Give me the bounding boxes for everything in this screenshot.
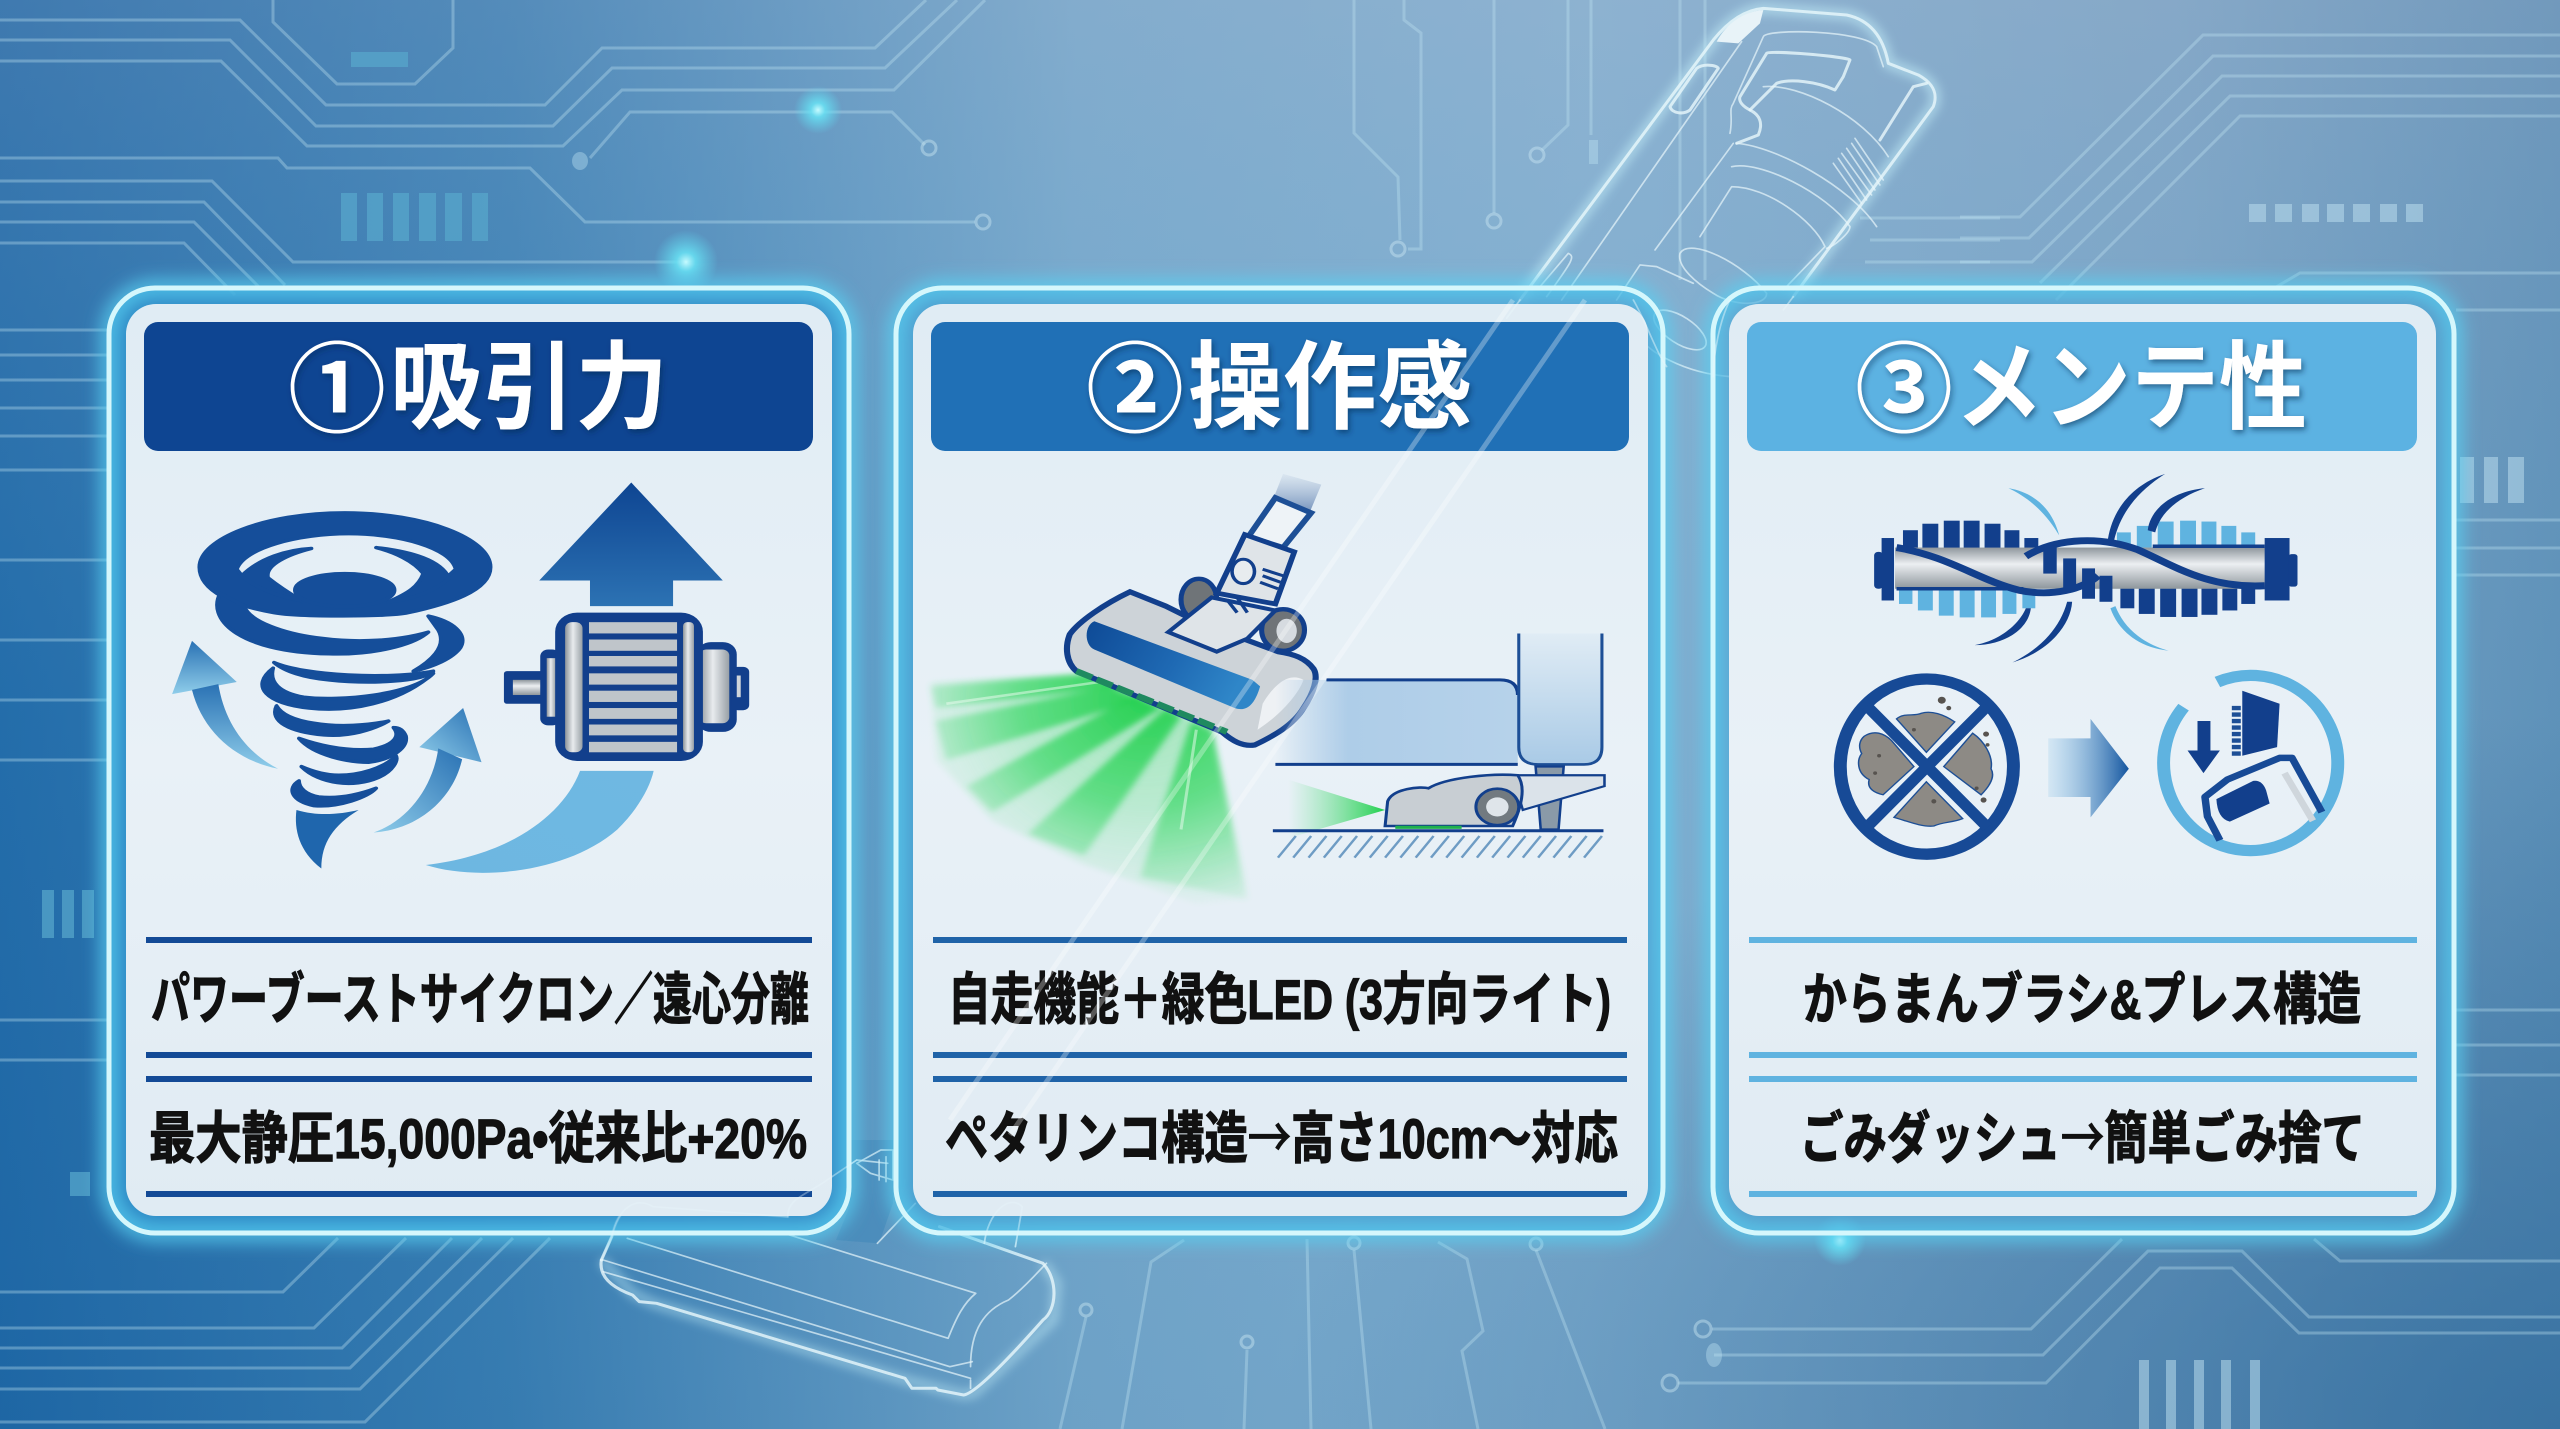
arrow: power up <box>426 483 723 873</box>
panels <box>109 288 2454 1233</box>
icon: tangle-free brush <box>1874 474 2297 662</box>
panel: handling <box>896 288 1663 1233</box>
panel frame <box>896 288 1663 1233</box>
text rows <box>933 937 1627 1197</box>
text rows: 自走機能＋緑色LED (3方向ライト) <box>948 968 1611 1031</box>
heading bar: ③ <box>1855 335 1953 445</box>
panel frame <box>1713 288 2454 1233</box>
text rows: ごみダッシュ→簡単ごみ捨て <box>1800 1094 2365 1175</box>
heading bar: ② <box>1086 335 1184 445</box>
vacuum wand overlay <box>950 300 1585 1135</box>
heading bar <box>931 322 1629 451</box>
heading bar: ① <box>288 335 386 445</box>
panel: maintenance <box>1713 288 2454 1233</box>
arrow: before to after <box>2048 719 2129 817</box>
text rows: パワーブーストサイクロン／遠心分離 <box>151 968 809 1031</box>
icon: no tangled dust <box>1840 679 2013 854</box>
text rows: ペタリンコ構造→高さ10cm～対応 <box>945 1094 1618 1175</box>
vacuum outline: handle and dust cup <box>1520 8 1935 377</box>
heading bar: メンテ性 <box>1955 335 2307 442</box>
panel: suction <box>109 288 849 1233</box>
icon: motor <box>504 613 749 761</box>
text rows: 最大静圧15,000Pa•従来比+20% <box>149 1107 807 1170</box>
icon: green LED beams <box>931 673 1247 903</box>
vacuum outline: nozzle <box>601 1140 1057 1395</box>
vacuum head overlay on panels <box>601 297 1793 1260</box>
heading bar: 吸引力 <box>390 335 668 442</box>
text rows <box>146 937 812 1197</box>
text rows <box>1749 937 2417 1197</box>
text rows: からまんブラシ&プレス構造 <box>1803 968 2361 1031</box>
heading bar: 操作感 <box>1188 335 1472 442</box>
icon: press and dump dust <box>2164 675 2338 851</box>
arrow: right swirl <box>374 708 482 833</box>
panel frame <box>109 288 849 1233</box>
icon: tornado <box>199 513 490 869</box>
arrow: left swirl <box>172 641 278 769</box>
heading bar <box>144 322 813 451</box>
heading bar <box>1747 322 2417 451</box>
icon: low furniture side view <box>1273 633 1604 858</box>
icon: cleaner head <box>1067 474 1321 745</box>
